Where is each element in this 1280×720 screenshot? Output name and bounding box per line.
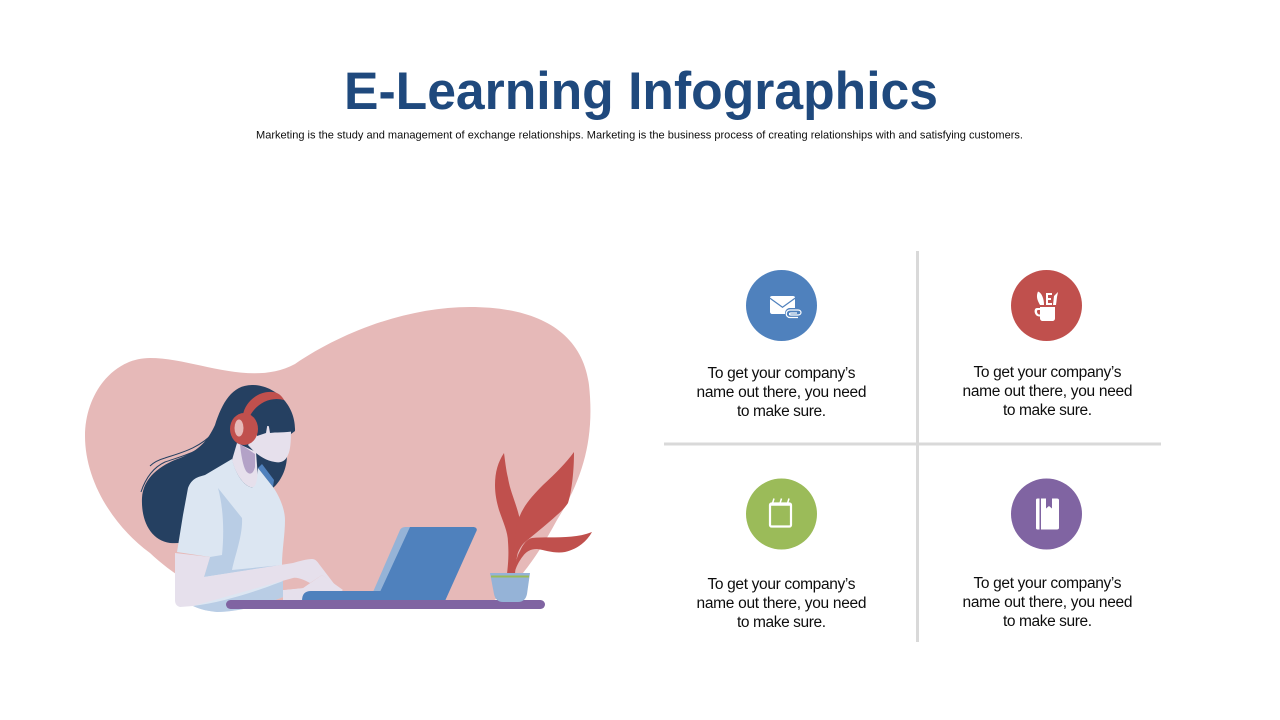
far hand	[283, 575, 343, 600]
item text: to make sure.	[737, 614, 826, 631]
plant pot	[490, 573, 530, 602]
item text: To get your company’s	[708, 576, 856, 593]
shirt	[177, 459, 285, 612]
item text: to make sure.	[1003, 402, 1092, 419]
subtitle text: Marketing is the study and management of exchange relationships. Marketing is the business process of creating relationships with and satisfying customers.	[256, 130, 1023, 142]
laptop screen	[378, 527, 477, 601]
lower shirt fold	[193, 581, 283, 612]
laptop screen back	[373, 527, 420, 592]
plant	[495, 452, 592, 574]
item text	[696, 576, 866, 631]
loose hair strands	[141, 433, 214, 492]
pink background blob	[85, 307, 590, 602]
item text	[696, 365, 866, 420]
fringe	[254, 397, 295, 436]
desk	[226, 600, 545, 609]
near arm and hand	[175, 553, 335, 607]
icon: envelope with paperclip	[746, 270, 817, 341]
item text: name out there, you need	[696, 384, 866, 401]
shirt collar accent	[258, 464, 274, 487]
icon: notepad	[746, 478, 817, 550]
panel: notepad item	[696, 478, 866, 631]
item text	[962, 364, 1132, 419]
hair	[142, 385, 295, 543]
pot stripe	[491, 576, 529, 578]
item text: to make sure.	[737, 403, 826, 420]
laptop base	[302, 591, 385, 601]
panel: book item	[962, 478, 1132, 630]
item text: To get your company’s	[708, 365, 856, 382]
headphones	[230, 392, 284, 445]
panel: email item	[696, 270, 866, 420]
item text: name out there, you need	[962, 594, 1132, 611]
item text: name out there, you need	[696, 595, 866, 612]
item text: To get your company’s	[974, 575, 1122, 592]
face	[248, 425, 291, 462]
icon: pencil cup	[1011, 270, 1082, 341]
grid dividers	[664, 251, 1161, 642]
item text: To get your company’s	[974, 364, 1122, 381]
neck shadow	[240, 444, 255, 474]
shirt shadow	[204, 488, 282, 577]
item text	[962, 575, 1132, 630]
illustration: woman learning on a laptop	[85, 307, 592, 612]
panel: stationery item	[962, 270, 1132, 419]
pink gap between hands	[283, 578, 310, 590]
icon: book with bookmark	[1011, 478, 1082, 550]
title: E-Learning Infographics	[344, 62, 938, 121]
item text: to make sure.	[1003, 613, 1092, 630]
neck	[232, 443, 258, 487]
item text: name out there, you need	[962, 383, 1132, 400]
